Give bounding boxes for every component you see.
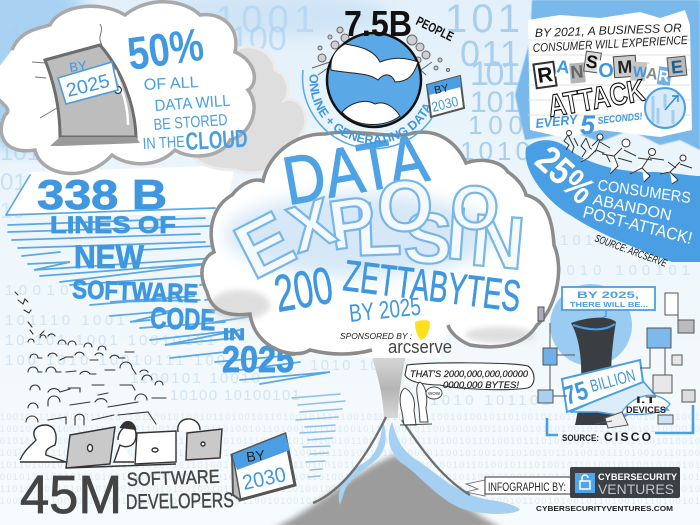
binary digits background: 011	[460, 33, 520, 74]
infographic canvas: 10 101 1001 10010101	[5, 332, 215, 349]
panel: code stat text: 2025	[222, 339, 294, 380]
title: explosion letters: N	[468, 198, 528, 285]
logo: cybersecurity ventures	[570, 467, 680, 498]
binary digits background: 10	[8, 22, 41, 55]
ransom letters: A	[556, 56, 571, 78]
panel: code stat text: LINES OF	[50, 212, 176, 239]
title: data: DATA	[277, 120, 434, 220]
label: by 2025: BY	[68, 58, 88, 75]
ransom letters: A	[645, 65, 659, 84]
icon: calendar by 2030 top: BY	[433, 82, 451, 97]
binary digits background: 100	[230, 20, 287, 58]
sponsor: arcserve: SPONSORED BY :	[340, 331, 413, 341]
panel: code stat text	[37, 171, 294, 380]
panel: code stat text: 338 B	[37, 171, 167, 218]
credit: infographic by	[466, 467, 680, 513]
binary digits background: 1001	[215, 0, 315, 41]
title: explosion letters: E	[221, 194, 308, 296]
panel: ransomware note	[528, 10, 692, 140]
label: i.t devices: DEVICES	[626, 405, 666, 416]
title: explosion letters: O	[377, 167, 433, 247]
icon: calendar by 2030 left: BY	[245, 446, 267, 465]
panel: cloud storage	[0, 2, 254, 174]
sponsor: arcserve: arcserve	[388, 337, 452, 357]
text: website: CYBERSECURITYVENTURES.COM	[536, 504, 673, 513]
text: consumers abandon post-attack: POST-ATTACK!	[581, 202, 694, 248]
infographic canvas: 00101101001011101001011010010110010100101101001011010010111010010110100101100101001011010010110100101110100101	[0, 472, 700, 482]
infographic canvas: 10100101110100101101001011001010010110100101101001011101001011010010110010100101101001011010010111010010110100	[0, 448, 700, 458]
ash mound	[270, 455, 505, 525]
ransom letters: R	[536, 63, 554, 88]
text: every 5 seconds: EVERY	[535, 112, 579, 131]
text: every 5 seconds	[535, 110, 644, 140]
ransom letters	[533, 51, 687, 88]
text: by 2021: BY 2021, A BUSINESS OR	[535, 21, 682, 40]
infographic canvas: 10010 100101	[540, 262, 690, 279]
speech bubble: bytes: 0000,000 BYTES!	[443, 380, 519, 391]
icon: calendar by 2030 top	[427, 76, 464, 117]
text: every 5 seconds: SECONDS!	[597, 111, 644, 127]
title: explosion letters: X	[279, 183, 344, 267]
infographic canvas: 01011010010110010100101101001011010010111010010110100101100101001011010010110100101110100101101001011001010010	[0, 436, 700, 446]
callout halo	[550, 284, 632, 366]
illustration: front row developers and laptops	[20, 419, 222, 468]
binary digits background: 101	[470, 86, 520, 119]
ransom letters: E	[670, 56, 684, 78]
banner: 75 billion: 75	[560, 375, 592, 411]
icon: cloud door	[32, 24, 140, 146]
binary digits background: 100	[468, 110, 523, 140]
infographic canvas: 10100 10100101	[170, 387, 300, 404]
icon: data bubbles	[312, 27, 450, 75]
title: 200 zettabytes	[270, 251, 523, 324]
title: by 2025: BY 2025	[348, 293, 422, 328]
text: source arcserve: SOURCE: ARCSERVE	[593, 233, 669, 270]
title: 200 zettabytes: ZETTABYTES	[341, 251, 523, 322]
credit: infographic by: INFOGRAPHIC BY:	[488, 482, 566, 494]
code scribble lines	[6, 175, 330, 384]
text: source cisco: SOURCE:	[562, 433, 599, 444]
title: explosion letters: L	[353, 186, 403, 273]
curved label: online and generating data: ONLINE + GENERATING DATA	[309, 74, 429, 144]
callout: by 2025 there will be: THERE WILL BE...	[570, 300, 648, 309]
ransom letters: N	[570, 61, 584, 83]
illustration: two onlookers	[400, 382, 442, 425]
panel: right side blue ink bleed	[515, 0, 700, 150]
stat: 45M software developers: DEVELOPERS	[126, 489, 234, 514]
logo: cybersecurity ventures: VENTURES	[598, 481, 674, 497]
illustration: two onlookers: WOW	[428, 391, 441, 396]
binary digits background	[0, 0, 530, 223]
title: explosion letters: I	[444, 191, 470, 276]
text: source cisco	[562, 430, 651, 444]
ransom letters: M	[617, 57, 633, 77]
text: of all data will be stored in the cloud: IN THE	[142, 134, 185, 153]
panel: people online globe	[302, 3, 466, 150]
sponsor: arcserve	[340, 320, 452, 357]
illustration: crowd of developers	[15, 292, 166, 425]
infographic canvas: 10110100101100101001011010010110100101110100101101001011001010010110100101101001011101001011010010110010100101	[0, 460, 700, 470]
stat: 45M software developers	[20, 465, 234, 525]
icon: data tower	[571, 318, 620, 425]
infographic canvas: 11010010110100101100101001011010010110100101110100101101001011001010010110100101101001011101001011010010110010	[0, 484, 700, 494]
callout: by 2025 there will be: BY 2025,	[577, 290, 639, 301]
label: i.t devices: I.T	[636, 395, 657, 405]
stat: 50%: 50%	[124, 18, 207, 80]
panel: grey cloud behind	[190, 47, 306, 173]
infographic canvas: 101001	[560, 232, 630, 249]
infographic canvas: 10010111010010110100101100101001011010010110100101110100101101001011001010010110100101101001011101001011010010	[0, 424, 700, 434]
smoke plume	[368, 345, 407, 418]
speech bubble: bytes: THAT'S 2000,000,000,00000	[410, 369, 529, 380]
cloud outline	[202, 132, 559, 354]
sheet behind code stat	[6, 165, 235, 215]
binary digits background: 01	[0, 169, 27, 196]
icon: connected devices	[538, 293, 695, 428]
callout: by 2025 there will be	[562, 287, 655, 326]
panel: explosion cloud	[202, 120, 559, 358]
text: people: PEOPLE	[414, 13, 456, 44]
icon: calendar by 2030 left	[232, 434, 295, 500]
label: i.t devices	[622, 395, 670, 416]
title: 200 zettabytes: 200	[270, 257, 337, 324]
icon: calendar by 2030 top: 2030	[430, 93, 460, 115]
binary digits background: 101	[0, 139, 40, 166]
text: of all data will be stored in the cloud: OF ALL	[143, 74, 199, 94]
panel: 25% consumers swoosh	[526, 138, 700, 270]
stat: 7.5B: 7.5B	[344, 3, 412, 44]
icon: clock	[645, 88, 685, 128]
stat: 45M software developers: 45M	[20, 465, 122, 525]
label: by 2025: 2025	[64, 71, 112, 102]
illustration: volcano	[270, 345, 520, 525]
binary digits background: 10	[0, 198, 24, 223]
text: consumers abandon post-attack: ABANDON	[591, 191, 673, 225]
stat: 25%: 25%	[527, 138, 603, 213]
globe	[327, 33, 421, 127]
ransom letters: W	[632, 64, 648, 82]
banner: 75 billion: BILLION	[588, 366, 637, 396]
panel: code stat text: CODE	[150, 302, 216, 337]
ransom letters: O	[597, 59, 615, 83]
infographic canvas: 1010 101101	[430, 392, 550, 409]
text: of all data will be stored in the cloud: BE STORED	[153, 112, 228, 134]
text: of all data will be stored in the cloud: DATA WILL	[154, 93, 231, 115]
text: of all data will be stored in the cloud	[142, 74, 248, 156]
lava	[339, 422, 520, 514]
infographic canvas: 100 1010 10010111 100	[5, 352, 225, 369]
speech bubble: bytes	[405, 363, 534, 391]
text: consumers abandon post-attack: CONSUMERS	[596, 177, 692, 207]
infographic canvas: 1001011101001011010010110010100101101001011010010111010010110100101100101001011010010110100101110100101101001	[0, 412, 700, 422]
ransom letters: S	[585, 51, 599, 73]
infographic canvas: 10010110100101101001011101001011010010110010100101101001011010010111010010110100101100101001011010010110100101	[0, 496, 700, 506]
panel: code stat text: SOFTWARE	[72, 274, 199, 308]
infographic canvas: 1100101 10010	[130, 370, 260, 387]
logo: cybersecurity ventures: CYBERSECURITY	[598, 472, 677, 482]
text: every 5 seconds: 5	[580, 110, 596, 140]
text: source cisco: CISCO	[604, 430, 651, 444]
text: by 2021	[532, 21, 689, 55]
title: explosion letters: S	[403, 198, 453, 280]
binary digits background: 1010	[460, 136, 530, 166]
title: explosion letters: P	[324, 181, 381, 265]
infographic canvas: 1001011	[5, 282, 95, 299]
illustration: fleeing people	[564, 130, 692, 184]
stat: 45M software developers: SOFTWARE	[126, 467, 220, 491]
volcano slopes	[313, 417, 470, 503]
infographic canvas: 101110 1001	[5, 312, 125, 329]
label: by 2025	[58, 58, 118, 104]
infographic canvas: 1010 1001	[310, 357, 400, 374]
text: attack outline: ATTACK	[545, 72, 648, 124]
title: explosion letters: O	[448, 172, 501, 245]
ransom letters: R	[657, 67, 671, 86]
banner: 75 billion	[560, 360, 668, 416]
binary digits background: 101	[470, 55, 520, 93]
icon: calendar by 2030 left: 2030	[240, 463, 288, 495]
wash shading	[225, 193, 495, 277]
continents	[331, 44, 418, 125]
title: explosion letters	[221, 167, 528, 296]
panel: code stat text: IN	[223, 325, 245, 344]
panel: code stat text: NEW	[74, 239, 145, 275]
text: of all data will be stored in the cloud: CLOUD	[185, 125, 248, 156]
panel: 75 billion devices	[538, 284, 695, 444]
text: consumers abandon post-attack	[581, 177, 694, 248]
